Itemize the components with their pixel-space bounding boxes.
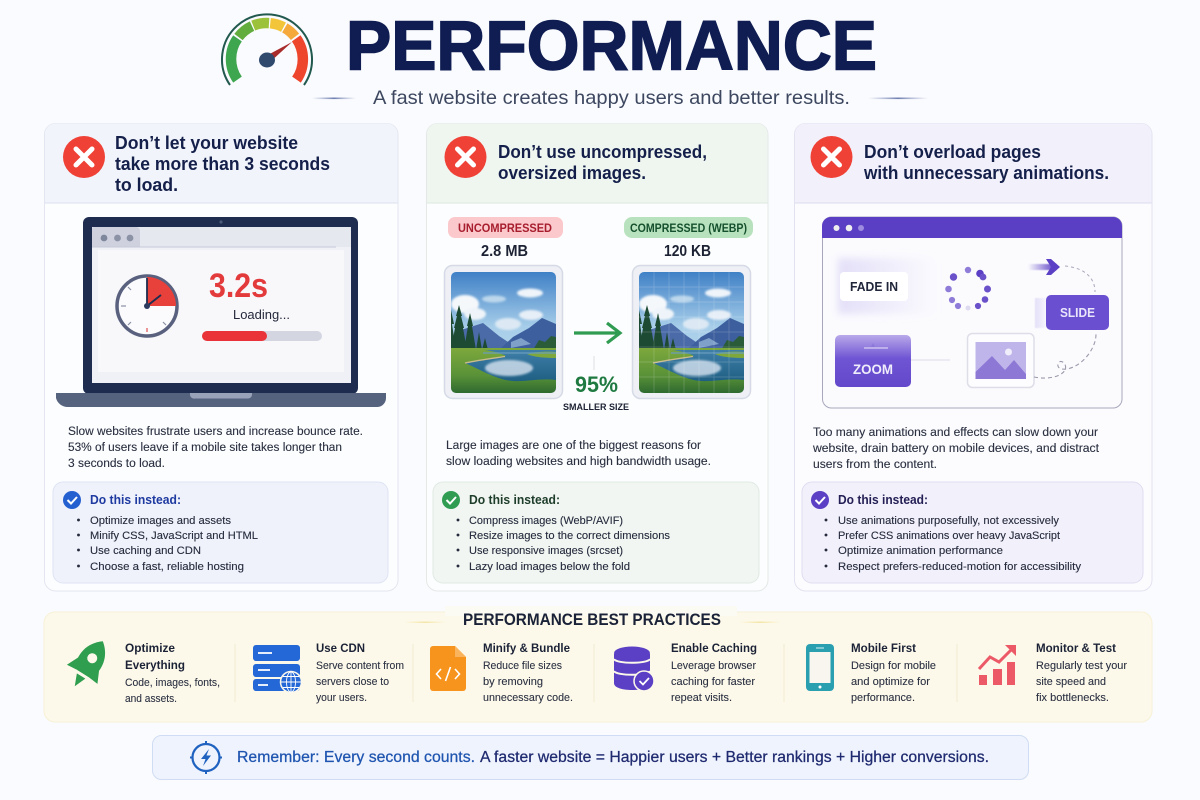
tips list (825, 515, 1081, 573)
heading: with unnecessary animations. (863, 163, 1109, 183)
practice: monitor and test: Regularly test your (1036, 660, 1127, 672)
panel: oversized images (426, 124, 768, 591)
practice: enable caching (614, 642, 757, 704)
description: Slow websites frustrate users and increase bounce rate. (68, 424, 363, 438)
practice: enable caching: caching for faster (671, 676, 755, 688)
heading: take more than 3 seconds (115, 154, 330, 174)
icon: check (811, 491, 829, 509)
tips list: Resize images to the correct dimensions (469, 530, 670, 542)
icon: rocket (59, 632, 118, 696)
practice: use cdn: Use CDN (316, 642, 365, 655)
practice: minify and bundle: Minify & Bundle (483, 642, 571, 655)
tips list: Choose a fast, reliable hosting (90, 561, 244, 573)
heading: Don’t overload pages (864, 142, 1041, 162)
practice: monitor and test: site speed and (1036, 676, 1106, 688)
description (812, 425, 1100, 471)
icon: speedometer gauge (222, 14, 312, 85)
tips list: Optimize images and assets (90, 515, 231, 527)
description: Large images are one of the biggest reasons for (446, 438, 701, 452)
compressed label: COMPRESSED (WEBP) (630, 221, 747, 235)
callout text (237, 749, 989, 766)
icon: lightning stopwatch (190, 741, 222, 774)
practice: optimize everything (59, 632, 220, 705)
icon: red cross (444, 136, 486, 178)
compressed label (624, 217, 753, 238)
icon: red cross (63, 136, 105, 178)
box heading: Do this instead: (469, 492, 560, 507)
slide chip: SLIDE (1060, 306, 1095, 320)
practice: use cdn: servers close to (316, 676, 389, 688)
tips list: Prefer CSS animations over heavy JavaScript (838, 530, 1061, 542)
practice: monitor and test: fix bottlenecks. (1036, 692, 1109, 704)
practice: enable caching: repeat visits. (671, 692, 732, 704)
uncompressed label (448, 217, 563, 238)
smaller size caption: SMALLER SIZE (563, 402, 629, 413)
tips list: Use responsive images (srcset) (469, 545, 623, 557)
panel header (45, 124, 398, 203)
box heading: Do this instead: (90, 492, 181, 507)
practice: mobile first: performance. (851, 692, 915, 704)
tips list: Respect prefers-reduced-motion for accessibility (838, 561, 1081, 573)
practice: minify and bundle: by removing (483, 676, 543, 688)
practice: optimize everything: Everything (125, 659, 185, 672)
practice: mobile first: Design for mobile (851, 660, 936, 672)
description (68, 424, 363, 470)
practice: mobile first (806, 642, 936, 704)
callout text: Remember: Every second counts. (237, 749, 475, 766)
tips list: Use animations purposefully, not excessively (838, 515, 1059, 527)
panel header (795, 124, 1152, 203)
slide chip (1046, 295, 1109, 330)
subtitle: A fast website creates happy users and better results. (373, 87, 850, 109)
motion arrow (1028, 259, 1060, 275)
tips list: Use caching and CDN (90, 545, 201, 557)
load time value: 3.2s (209, 267, 268, 305)
fade in chip (840, 272, 908, 301)
compressed photo (632, 266, 750, 398)
loading spinner (945, 267, 991, 310)
loading label: Loading... (233, 307, 290, 322)
description: slow loading websites and high bandwidth usage. (446, 454, 711, 468)
panel: unnecessary animations (794, 124, 1152, 591)
heading (863, 142, 1109, 183)
section heading: PERFORMANCE BEST PRACTICES (463, 611, 721, 629)
laptop illustration (56, 217, 386, 407)
practice: mobile first: and optimize for (851, 676, 930, 688)
heading (498, 142, 707, 183)
practice: monitor and test: Monitor & Test (1036, 642, 1116, 655)
size: 2.8 MB: 2.8 MB (481, 243, 528, 260)
fade in chip: FADE IN (850, 280, 898, 294)
callout text: A faster website = Happier users + Better rankings + Higher conversions. (480, 749, 989, 766)
heading: to load. (115, 175, 178, 195)
description: 3 seconds to load. (68, 456, 165, 470)
practice: optimize everything: Code, images, fonts, (125, 677, 220, 689)
box heading: Do this instead: (838, 492, 928, 507)
practice: use cdn: Serve content from (316, 660, 404, 672)
do this instead box (802, 482, 1143, 583)
size: 120 KB: 120 KB (664, 243, 711, 260)
tips list: Optimize animation performance (838, 545, 1003, 557)
practice: minify and bundle (430, 642, 573, 704)
uncompressed photo (444, 266, 562, 398)
description: users from the content. (813, 457, 937, 471)
description: Too many animations and effects can slow down your (813, 425, 1098, 439)
tips list: Minify CSS, JavaScript and HTML (90, 530, 258, 542)
tips list (457, 515, 670, 573)
do this instead box (53, 482, 388, 583)
icon: red cross (810, 136, 852, 178)
heading: Don’t let your website (115, 133, 298, 153)
practice: enable caching: Leverage browser (671, 660, 756, 672)
practice: use cdn (253, 642, 404, 704)
icon: check (442, 491, 460, 509)
zoom chip: ZOOM (853, 362, 893, 377)
image tile (968, 334, 1034, 388)
do this instead box (433, 482, 759, 583)
animated browser window (822, 217, 1122, 408)
uncompressed label: UNCOMPRESSED (458, 221, 552, 235)
95% stat: 95% (575, 372, 618, 397)
heading: oversized images. (498, 163, 646, 183)
icon: check (63, 491, 81, 509)
icon: code file (430, 646, 466, 691)
practice: mobile first: Mobile First (851, 642, 916, 655)
practice: optimize everything: Optimize (125, 642, 176, 655)
panel header (427, 124, 768, 203)
zoom chip (835, 335, 911, 387)
icon: database with check (614, 646, 654, 691)
callout: remember (152, 736, 1028, 780)
practice: enable caching: Enable Caching (671, 642, 757, 655)
panel: slow load time (44, 124, 398, 591)
icon: server with globe (253, 645, 302, 692)
title: PERFORMANCE (346, 6, 877, 84)
practice: optimize everything: and assets. (125, 693, 177, 705)
tips list: Lazy load images below the fold (469, 561, 630, 573)
stopwatch (117, 276, 177, 336)
tips list: Compress images (WebP/AVIF) (469, 515, 623, 527)
practice: monitor and test (979, 642, 1127, 704)
practice: minify and bundle: Reduce file sizes (483, 660, 562, 672)
description: website, drain battery on mobile devices, and distract (812, 441, 1100, 455)
panel: best practices (44, 606, 1152, 722)
heading (115, 133, 330, 195)
description (446, 438, 711, 468)
practice: use cdn: your users. (316, 692, 367, 704)
icon: rising chart (979, 645, 1016, 685)
arrow (574, 323, 620, 343)
tips list (77, 515, 258, 573)
heading: Don’t use uncompressed, (498, 142, 707, 162)
practice: minify and bundle: unnecessary code. (483, 692, 573, 704)
progress bar (202, 331, 322, 341)
description: 53% of users leave if a mobile site takes longer than (68, 440, 342, 454)
icon: phone (806, 644, 834, 691)
